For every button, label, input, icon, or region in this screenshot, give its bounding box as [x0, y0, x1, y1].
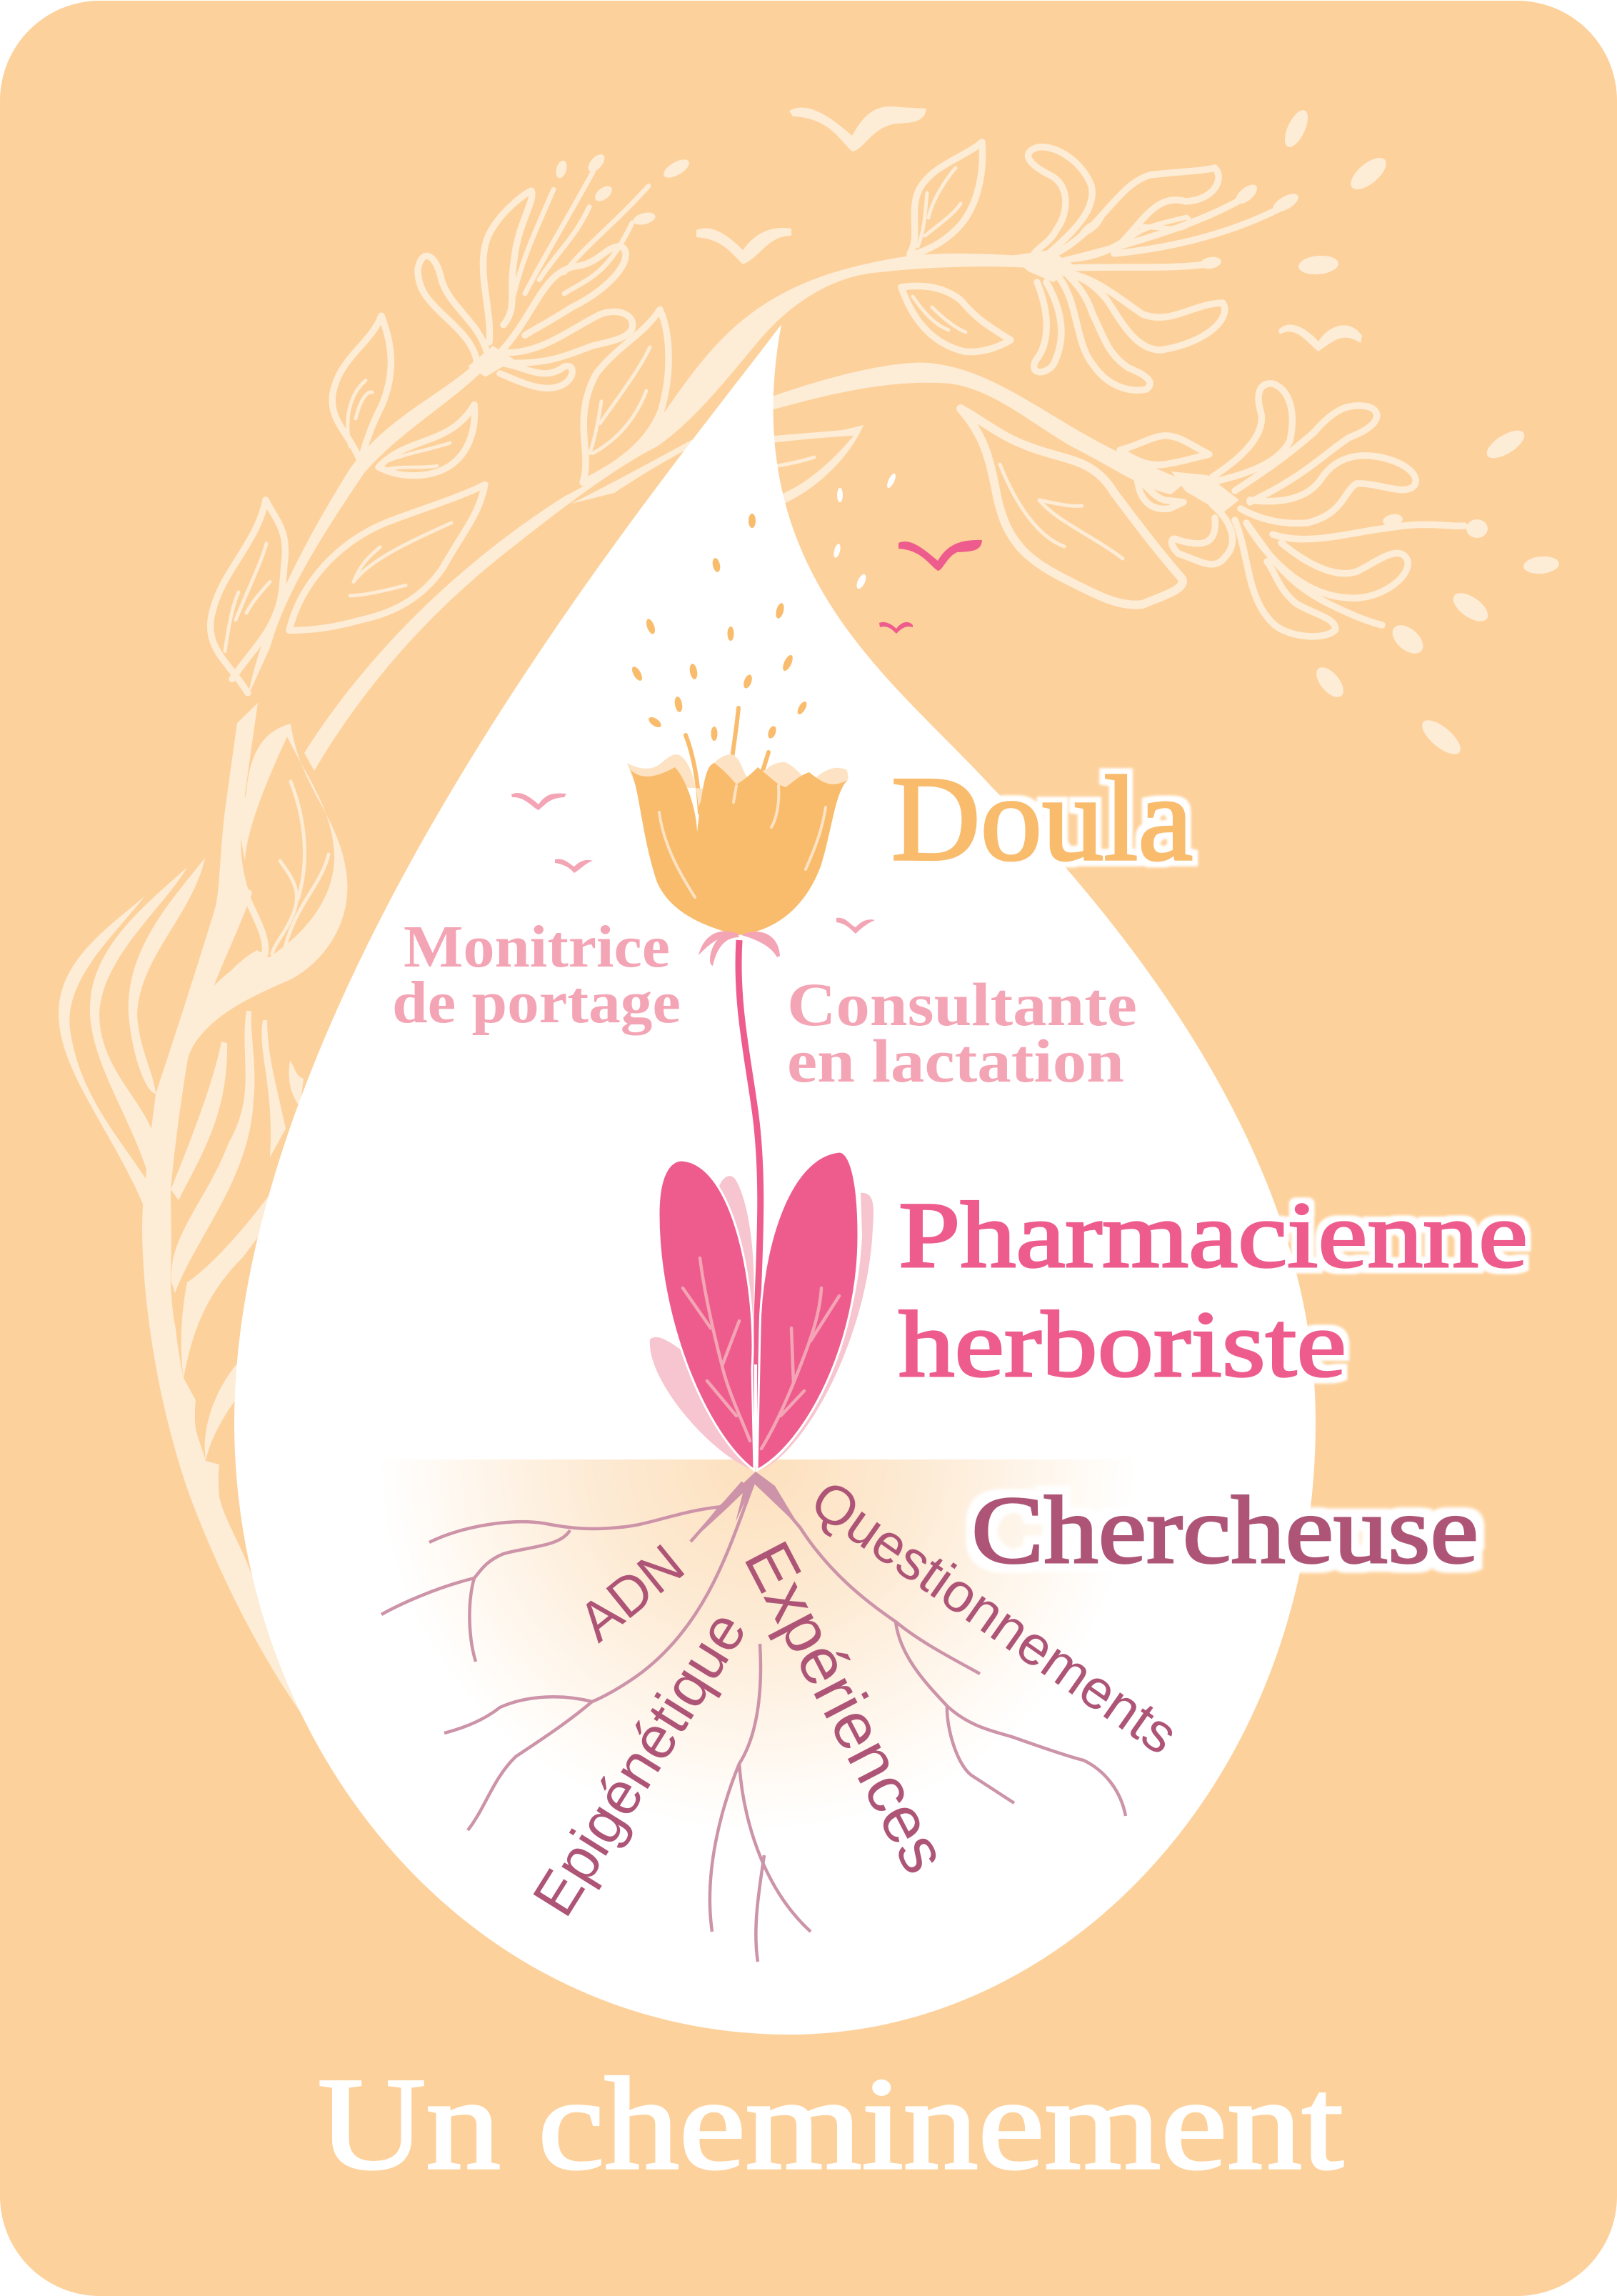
sepals — [699, 932, 780, 966]
label: Pharmacienne herboriste: Pharmacienne — [898, 1182, 1528, 1287]
label: Monitrice de portage: Monitrice — [404, 914, 670, 980]
back petals — [627, 754, 848, 807]
flower head top right — [1011, 147, 1301, 390]
label: Consultante en lactation — [787, 970, 1137, 1095]
leaf 2 — [379, 405, 475, 476]
label: Consultante en lactation: Consultante — [787, 970, 1137, 1039]
lower leaf — [189, 724, 347, 1054]
label: Pharmacienne herboriste — [898, 1182, 1528, 1397]
leaf up — [910, 142, 983, 256]
stem white line — [754, 1364, 757, 1466]
frond 1 — [59, 896, 146, 1207]
illustration: cream tree — [59, 142, 1488, 1722]
label: Doula: Doula — [891, 752, 1193, 886]
falling seeds cream — [661, 107, 1560, 760]
leaf veins — [683, 1258, 839, 1449]
big hanging leaf — [961, 409, 1183, 605]
title: Un cheminement — [318, 2051, 1343, 2197]
pale leaf middle — [719, 1176, 754, 1364]
frond 7 — [181, 1172, 286, 1378]
frond 8 — [205, 1357, 246, 1461]
root: epigenetique — [444, 1483, 754, 1830]
label: Monitrice de portage: de portage — [392, 969, 681, 1036]
root apex — [691, 1472, 800, 1542]
stamens — [686, 708, 769, 813]
flower head right — [1120, 384, 1488, 637]
root: left — [381, 1507, 722, 1662]
soil gradient — [379, 1459, 1136, 1831]
trunk — [142, 703, 336, 1722]
root: right — [759, 1478, 1126, 1816]
root: middle — [710, 1644, 811, 1962]
leaf behind the drop — [757, 425, 863, 507]
stem — [739, 940, 761, 1464]
pale leaf right — [761, 1193, 873, 1470]
second main branch — [304, 254, 1031, 771]
root labels — [520, 1468, 1188, 1927]
frond 5 — [171, 1011, 254, 1293]
label: Pharmacienne herboriste: herboriste — [898, 1292, 1346, 1397]
roots — [381, 1472, 1126, 1962]
label: Consultante en lactation: en lactation — [787, 1027, 1124, 1095]
top right branch leaves and flower — [901, 142, 1488, 637]
leaf left — [659, 1160, 754, 1470]
bloom — [630, 763, 848, 935]
label: ADN: ADN — [566, 1532, 696, 1653]
label: Expériences: Expériences — [730, 1530, 961, 1885]
leaf 3 — [289, 484, 485, 630]
frond 2 — [90, 867, 187, 1172]
third main branch — [571, 363, 1186, 504]
flower: doula — [627, 708, 873, 1470]
frond 3 — [129, 858, 205, 1094]
label: Monitrice de portage — [392, 914, 681, 1036]
leaf on main branch — [583, 309, 669, 482]
label: Chercheuse: Chercheuse — [971, 1477, 1478, 1584]
white drop — [234, 324, 1316, 2035]
label: Epigénétique: Epigénétique — [520, 1599, 759, 1927]
leaf down — [901, 286, 1011, 352]
bloom highlights — [659, 786, 826, 897]
light pink birds — [511, 793, 875, 934]
pink birds — [879, 540, 982, 634]
root: adn — [691, 1482, 743, 1542]
frond 9 — [289, 1061, 304, 1107]
frond 4 — [171, 1042, 227, 1200]
leaf right — [757, 1152, 858, 1470]
leaf 1 — [332, 316, 391, 462]
upper left flower branch — [211, 151, 669, 697]
flower head upper left — [418, 151, 657, 388]
birds cream — [696, 106, 1362, 351]
frond 6 — [261, 1020, 286, 1157]
pale leaf left — [650, 1337, 750, 1469]
seeds white over peach — [833, 472, 897, 590]
seeds orange — [630, 514, 808, 741]
stem — [248, 366, 480, 697]
leaf 4 — [211, 500, 285, 693]
label: Questionnements: Questionnements — [800, 1468, 1188, 1766]
